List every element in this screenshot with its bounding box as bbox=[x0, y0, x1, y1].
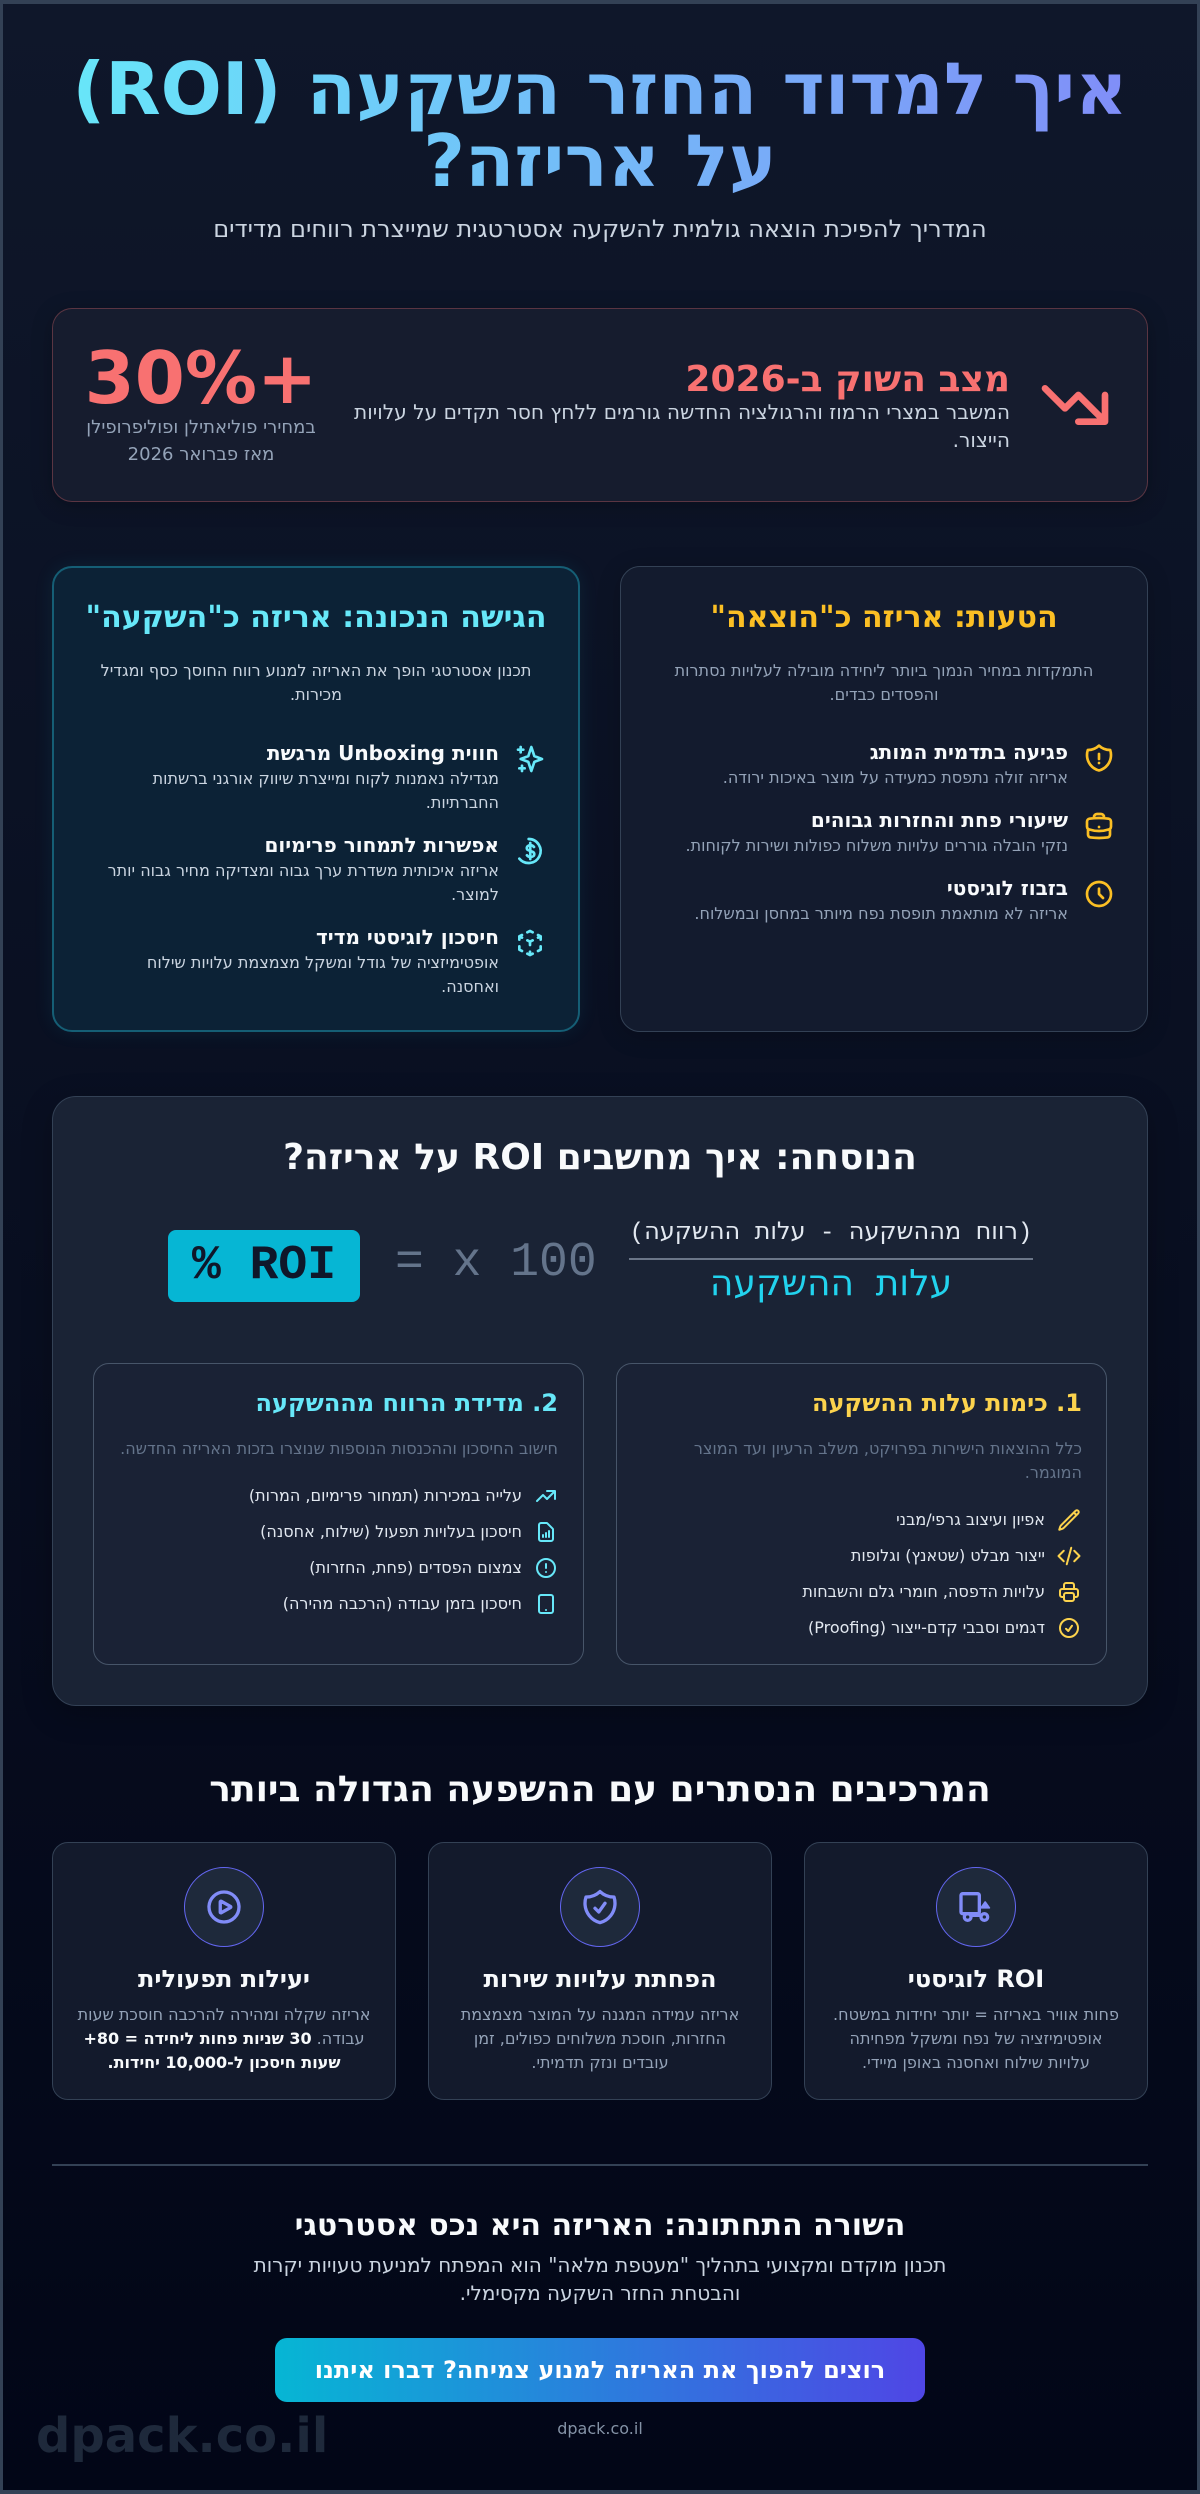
item text: שיעורי פחת והחזרות גבוהים bbox=[811, 808, 1068, 832]
panel: the right approach bbox=[52, 566, 580, 1032]
icon: code brackets bbox=[1058, 1546, 1080, 1566]
card title: יעילות תפעולית bbox=[138, 1965, 310, 1993]
call to action button bbox=[275, 2338, 925, 2402]
item text: אריזה איכותית משדרת ערך גבוה ומצדיקה מחיר גבוה יותר למוצר. bbox=[108, 861, 499, 904]
stat caption: מאז פברואר 2026 bbox=[128, 444, 274, 465]
call to action button: רוצים להפוך את האריזה למנוע צמיחה? דברו איתנו bbox=[315, 2356, 885, 2384]
item: brand damage bbox=[723, 740, 1112, 787]
item text bbox=[147, 925, 499, 996]
panel: formula bbox=[52, 1096, 1148, 1706]
item text: אריזה לא מותאמת תופסת נפח מיותר במחסן ובמשלוח. bbox=[694, 904, 1068, 923]
item text bbox=[694, 876, 1068, 923]
numerator: (רווח מההשקעה - עלות ההשקעה) bbox=[630, 1217, 1032, 1247]
panel: operational efficiency bbox=[52, 1842, 396, 2100]
icon: briefcase bbox=[1086, 812, 1112, 840]
icon: tablet bbox=[538, 1594, 554, 1614]
icon: shield alert bbox=[1086, 744, 1112, 772]
denominator: עלות ההשקעה bbox=[710, 1263, 952, 1304]
panel: service costs bbox=[428, 1842, 772, 2100]
stat: plus thirty percent: +30% bbox=[85, 336, 317, 420]
icon: truck bbox=[936, 1867, 1016, 1947]
return item: חיסכון בזמן עבודה (הרכבה מהירה) bbox=[283, 1594, 522, 1613]
formula: equals times hundred: = x 100 bbox=[395, 1236, 597, 1290]
cost item: דגמים וסבבי קדם-ייצור (Proofing) bbox=[808, 1618, 1045, 1637]
icon: trending up bbox=[536, 1490, 556, 1502]
item text bbox=[685, 808, 1068, 855]
divider bbox=[52, 2164, 1148, 2166]
step 2 intro: חישוב החיסכון וההכנסות הנוספות שנוצרו בזכות האריזה החדשה. bbox=[120, 1439, 558, 1458]
card title: הפחתת עלויות שירות bbox=[483, 1965, 717, 1993]
panel: the mistake bbox=[620, 566, 1148, 1032]
hidden components heading: המרכיבים הנסתרים עם ההשפעה הגדולה ביותר bbox=[209, 1769, 991, 1810]
icon: trending down arrow bbox=[1042, 385, 1108, 425]
card title: ROI לוגיסטי bbox=[908, 1965, 1044, 1993]
cost item: ייצור מבלט (שטאנץ) וגלופות bbox=[851, 1546, 1045, 1565]
approach heading: הגישה הנכונה: אריזה כ"השקעה" bbox=[86, 600, 546, 635]
bottom line text: תכנון מוקדם ומקצועי בתהליך "מעטפת מלאה" הוא המפתח למניעת טעויות יקרות והבטחת החזר השקעה מקסימלי. bbox=[254, 2253, 946, 2305]
icon: refund dollar bbox=[518, 838, 542, 864]
icon: check circle bbox=[1059, 1618, 1079, 1638]
panel: step 1 investment cost bbox=[616, 1363, 1107, 1665]
icon: pencil bbox=[1058, 1509, 1080, 1531]
panel: step 2 return measurement bbox=[93, 1363, 584, 1665]
return item: עלייה במכירות (תמחור פרימיום, המרות) bbox=[249, 1486, 522, 1505]
mistake intro: התמקדות במחיר הנמוך ביותר ליחידה מובילה לעלויות נסתרות והפסדים כבדים. bbox=[675, 661, 1093, 704]
formula heading: הנוסחה: איך מחשבים ROI על אריזה? bbox=[283, 1137, 917, 1178]
panel: logistic ROI bbox=[804, 1842, 1148, 2100]
return list bbox=[249, 1486, 556, 1614]
item: unboxing bbox=[152, 741, 544, 812]
stat caption bbox=[86, 417, 316, 465]
item: premium pricing bbox=[108, 833, 542, 904]
item text: פגיעה בתדמית המותג bbox=[870, 740, 1068, 764]
cost item: אפיון ועיצוב גרפי/מבני bbox=[896, 1510, 1045, 1529]
item text: אופטימיזציה של גודל ומשקל מצמצמת עלויות שילוח ואחסנה. bbox=[147, 953, 499, 996]
bottom line heading: השורה התחתונה: האריזה היא נכס אסטרטגי bbox=[295, 2208, 905, 2243]
banner text: המשבר במצרי הרמוז והרגולציה החדשה גורמים ללחץ חסר תקדים על עלויות הייצור. bbox=[354, 400, 1010, 452]
step 1 heading: 1. כימות עלות ההשקעה bbox=[812, 1389, 1082, 1417]
item: logistics waste bbox=[694, 876, 1112, 923]
panel: market status banner bbox=[52, 308, 1148, 502]
icon: play circle bbox=[184, 1867, 264, 1947]
cost list bbox=[802, 1509, 1080, 1638]
item text bbox=[723, 740, 1068, 787]
return item: צמצום הפסדים (פחת, החזרות) bbox=[309, 1558, 522, 1577]
title: איך למדוד החזר השקעה (ROI) על אריזה? bbox=[72, 47, 1128, 203]
icon: sparkles bbox=[516, 746, 544, 772]
formula: ROI badge bbox=[168, 1230, 360, 1302]
item: logistics savings bbox=[147, 925, 542, 996]
item text: אריזה זולה נתפסת כמעידה על מוצר באיכות ירודה. bbox=[723, 768, 1068, 787]
icon: document chart bbox=[538, 1522, 554, 1542]
formula: fraction bbox=[629, 1217, 1033, 1304]
item text: חווית Unboxing מרגשת bbox=[267, 741, 499, 765]
item text: חיסכון לוגיסטי מדיד bbox=[316, 925, 499, 949]
item text bbox=[108, 833, 499, 904]
card text: אריזה עמידה המגנה על המוצר מצמצמת החזרות, חוסכת משלוחים כפולים, זמן עובדים ונזק תדמיתי. bbox=[461, 2005, 739, 2072]
banner heading: מצב השוק ב-2026 bbox=[685, 359, 1010, 400]
website link: dpack.co.il bbox=[557, 2419, 643, 2438]
cost item: עלויות הדפסה, חומרי גלם והשבחות bbox=[802, 1582, 1045, 1601]
item text: נזקי הובלה גוררים עלויות משלוח כפולות ושירות לקוחות. bbox=[685, 836, 1068, 855]
mistake heading: הטעות: אריזה כ"הוצאה" bbox=[710, 600, 1058, 635]
item text bbox=[152, 741, 499, 812]
subtitle: המדריך להפיכת הוצאה גולמית להשקעה אסטרטגית שמייצרת רווחים מדידים bbox=[213, 215, 987, 243]
card text: אריזה שקלה ומהירה להרכבה חוסכת שעות עבודה. 30 שניות פחות ליחידה = 80+ שעות חיסכון ל-10,000 יחידות. bbox=[78, 2005, 370, 2072]
icon: shield check bbox=[560, 1867, 640, 1947]
approach intro: תכנון אסטרטגי הופך את האריזה למנוע רווח החוסך כסף ומגדיל מכירות. bbox=[101, 661, 531, 704]
watermark: dpack.co.il bbox=[36, 2408, 328, 2464]
return item: חיסכון בעלויות תפעול (שילוח, אחסנה) bbox=[260, 1522, 522, 1541]
fraction bar bbox=[629, 1258, 1033, 1260]
item: returns bbox=[685, 808, 1112, 855]
icon: alert circle bbox=[536, 1558, 556, 1578]
step 2 heading: 2. מדידת הרווח מההשקעה bbox=[255, 1389, 558, 1417]
icon: cube bbox=[518, 930, 542, 956]
step 1 intro: כלל ההוצאות הישירות בפרויקט, משלב הרעיון ועד המוצר המוגמר. bbox=[694, 1439, 1082, 1482]
item text: מגדילה נאמנות לקוח ומייצרת שיווק אורגני ברשתות החברתיות. bbox=[153, 769, 499, 812]
card text: פחות אוויר באריזה = יותר יחידות במשטח. אופטימיזציה של נפח ומשקל מפחיתה עלויות שילוח ואחסנה באופן מיידי. bbox=[833, 2005, 1119, 2072]
formula: ROI badge: % ROI bbox=[192, 1239, 336, 1293]
stat caption: במחירי פוליאתילן ופוליפרופילן bbox=[86, 417, 316, 438]
icon: printer bbox=[1059, 1582, 1079, 1602]
item text: בזבוז לוגיסטי bbox=[947, 876, 1068, 900]
item text: אפשרות לתמחור פרימיום bbox=[264, 833, 499, 857]
icon: clock bbox=[1086, 880, 1112, 908]
